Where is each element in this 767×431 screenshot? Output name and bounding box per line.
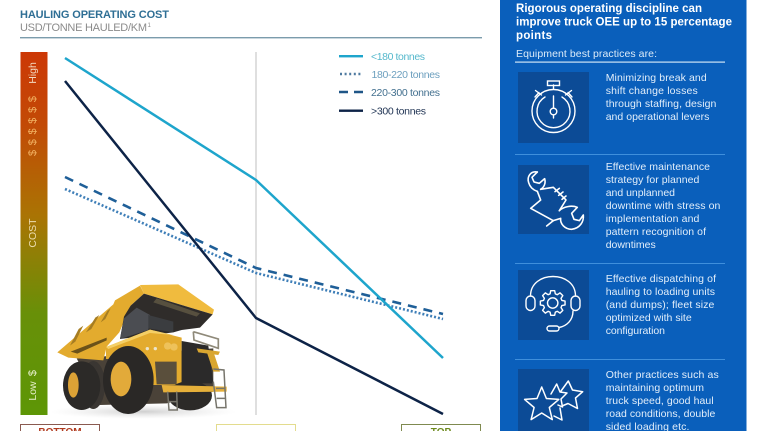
front tyre <box>103 346 154 414</box>
heading: hauling operating cost: HAULING OPERATING COST <box>20 9 169 21</box>
tier box: bottom <box>20 424 100 431</box>
text: maintenance strategy: and unplanned <box>606 187 675 199</box>
legend: <180 tonnes <box>371 51 425 63</box>
heading: hauling operating cost: USD/TONNE HAULED/KM <box>20 22 147 34</box>
truck illustration <box>50 284 237 419</box>
text: dispatching: configuration <box>606 325 665 337</box>
text: other practices: Other practices such as <box>606 369 719 381</box>
rear tyres <box>82 361 105 409</box>
practice: maintenance strategy <box>518 161 721 251</box>
panel subheading: Equipment best practices are: <box>516 48 657 60</box>
text: maintenance strategy: downtimes <box>606 239 656 251</box>
icon: headset with gear <box>518 270 589 340</box>
legend: >300 tonnes <box>371 106 426 118</box>
cost scale bar: COST <box>27 218 39 248</box>
text: maintenance strategy: downtime with stress on <box>606 200 721 212</box>
cost scale bar: Low <box>27 381 39 401</box>
cost scale bar: $ <box>27 370 39 376</box>
icon: stopwatch <box>518 72 589 143</box>
text: dispatching: (and dumps); fleet size <box>606 299 715 311</box>
line: 180-220 tonnes <box>65 189 443 319</box>
practice: dispatching <box>518 270 716 340</box>
text: other practices: truck speed, good haul <box>606 395 714 407</box>
cost scale bar: $ $ $ $ $ $ <box>27 96 39 156</box>
panel heading: improve truck OEE up to 15 percentage <box>516 16 732 28</box>
text: maintenance strategy: Effective maintenance <box>606 161 710 173</box>
bumper <box>162 385 227 392</box>
text: other practices: road conditions, double <box>606 408 716 420</box>
text: maintenance strategy <box>606 161 721 251</box>
chassis <box>77 348 213 405</box>
panel heading <box>516 3 732 42</box>
panel: equipment best practices <box>500 0 746 431</box>
text: dispatching: optimized with site <box>606 312 692 324</box>
icon: hand with wrench <box>518 165 589 234</box>
line: over 300 tonnes <box>65 81 443 414</box>
stairs <box>182 341 213 383</box>
deck body <box>106 330 182 385</box>
median divider line <box>255 52 257 415</box>
icon: three stars <box>518 369 589 431</box>
heading: hauling operating cost <box>20 9 482 38</box>
text: maintenance strategy: pattern recognition of <box>606 226 706 238</box>
text: other practices <box>606 369 719 431</box>
line: under 180 tonnes <box>65 58 443 358</box>
right tyre <box>168 381 212 410</box>
legend <box>339 51 440 118</box>
text: break and shift change <box>606 72 717 123</box>
practice: other practices <box>518 369 719 431</box>
legend: 220-300 tonnes <box>371 87 440 99</box>
text: break and shift change: and operational levers <box>606 111 709 123</box>
panel heading: Rigorous operating discipline can <box>516 3 702 15</box>
text: break and shift change: through staffing, design <box>606 98 717 110</box>
ladders <box>168 392 177 410</box>
bed side <box>57 286 144 360</box>
practice: break and shift change <box>518 72 717 143</box>
text: break and shift change: shift change losses <box>606 85 698 97</box>
line chart: cost by truck size <box>65 58 443 414</box>
line: 220-300 tonnes <box>65 177 443 314</box>
tier box: middle <box>216 424 296 431</box>
text: other practices: maintaining optimum <box>606 382 704 394</box>
text: dispatching: Effective dispatching of <box>606 273 716 285</box>
text: dispatching: hauling to loading units <box>606 286 715 298</box>
panel heading: points <box>516 30 552 42</box>
text: maintenance strategy: strategy for planned <box>606 174 700 186</box>
text: break and shift change: Minimizing break and <box>606 72 707 84</box>
cost scale bar <box>20 52 48 415</box>
text: maintenance strategy: implementation and <box>606 213 700 225</box>
canopy <box>140 284 214 314</box>
text: dispatching <box>606 273 716 337</box>
tier box: top <box>402 424 480 431</box>
heading: hauling operating cost: 1 <box>148 23 152 29</box>
cost scale bar: High <box>27 62 39 84</box>
legend: 180-220 tonnes <box>372 69 440 81</box>
